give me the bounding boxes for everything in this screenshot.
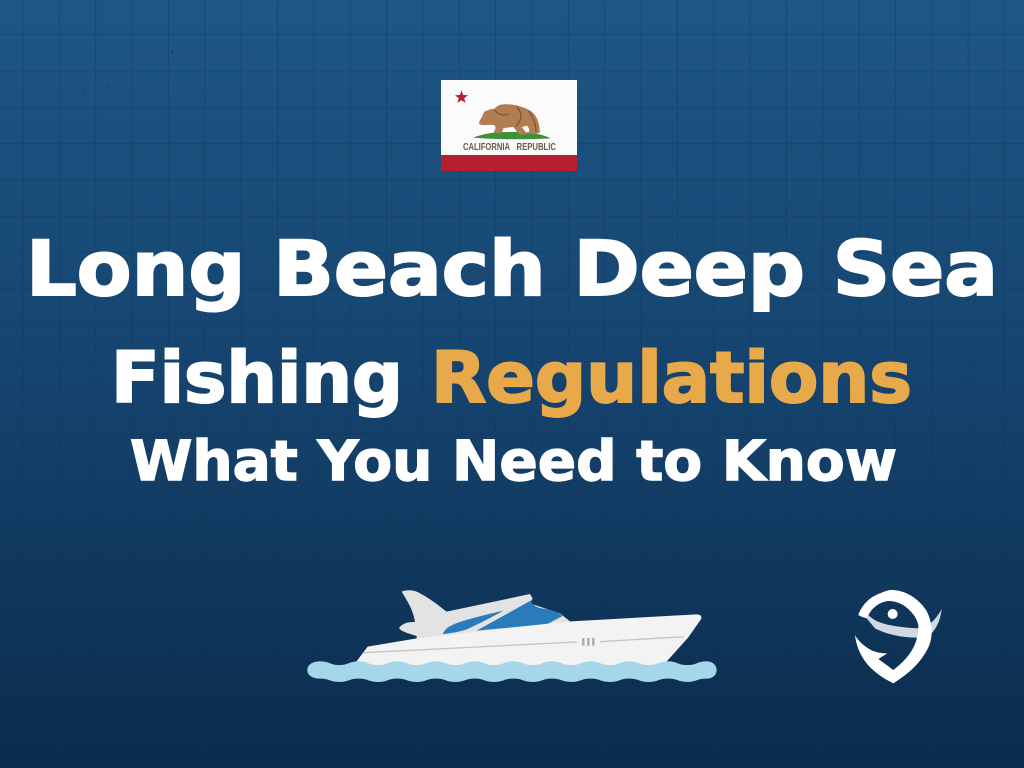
icon: bear on grass bbox=[473, 104, 551, 139]
title: line two bbox=[111, 337, 912, 419]
icon: California flag: REPUBLIC bbox=[516, 142, 556, 153]
icon: fish hook logo bbox=[855, 590, 942, 683]
icon: motor yacht on waves bbox=[307, 590, 717, 682]
title: line one: Long Beach Deep Sea bbox=[26, 224, 998, 313]
title: line two: Regulations bbox=[431, 337, 912, 419]
title: line two: Fishing bbox=[111, 337, 403, 419]
subtitle: What You Need to Know bbox=[130, 429, 897, 493]
icon: California flag bbox=[441, 80, 577, 171]
icon: California flag: CALIFORNIA bbox=[463, 142, 510, 153]
